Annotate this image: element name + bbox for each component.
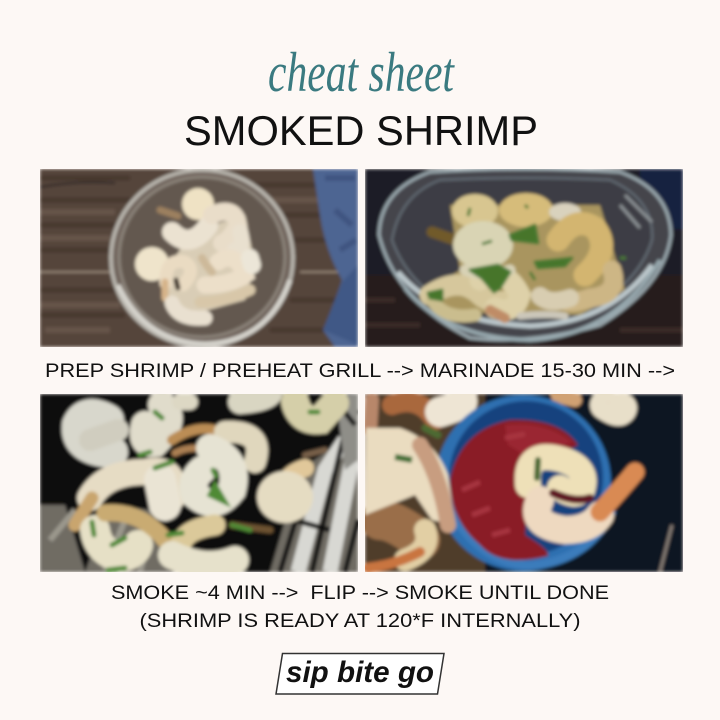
caption: second row steps: SMOKE ~4 MIN --> FLIP --> SMOKE UNTIL DONE — [111, 583, 609, 604]
photo panel: shrimp with cocktail sauce — [365, 394, 683, 572]
photo panel: raw shrimp in glass bowl — [40, 169, 358, 347]
caption: readiness note: (SHRIMP IS READY AT 120*F INTERNALLY) — [140, 611, 580, 632]
glass bowl — [111, 170, 293, 346]
grilled shrimp — [75, 394, 335, 565]
herbs — [92, 412, 318, 570]
shrimp in sauce — [528, 457, 635, 530]
glass bowl — [379, 169, 671, 340]
chopped herbs — [428, 205, 626, 300]
cocktail sauce — [450, 420, 578, 560]
blue towel — [313, 169, 358, 347]
marinated shrimp with herbs — [430, 193, 625, 318]
raw shrimp — [135, 188, 255, 318]
caption: first row steps: PREP SHRIMP / PREHEAT GRILL --> MARINADE 15-30 MIN --> — [45, 361, 675, 382]
blue bowl — [435, 395, 611, 571]
photo panel: shrimp on grill — [40, 394, 358, 572]
shrimp over bowl edge — [365, 428, 455, 525]
script heading: cheat sheet: cheat sheet — [268, 42, 455, 104]
logo: sip bite go: sip bite go — [286, 656, 434, 689]
title: smoked shrimp: SMOKED SHRIMP — [184, 107, 538, 154]
photo panel: marinated shrimp in glass bowl — [365, 169, 683, 347]
background shrimp — [368, 396, 622, 568]
